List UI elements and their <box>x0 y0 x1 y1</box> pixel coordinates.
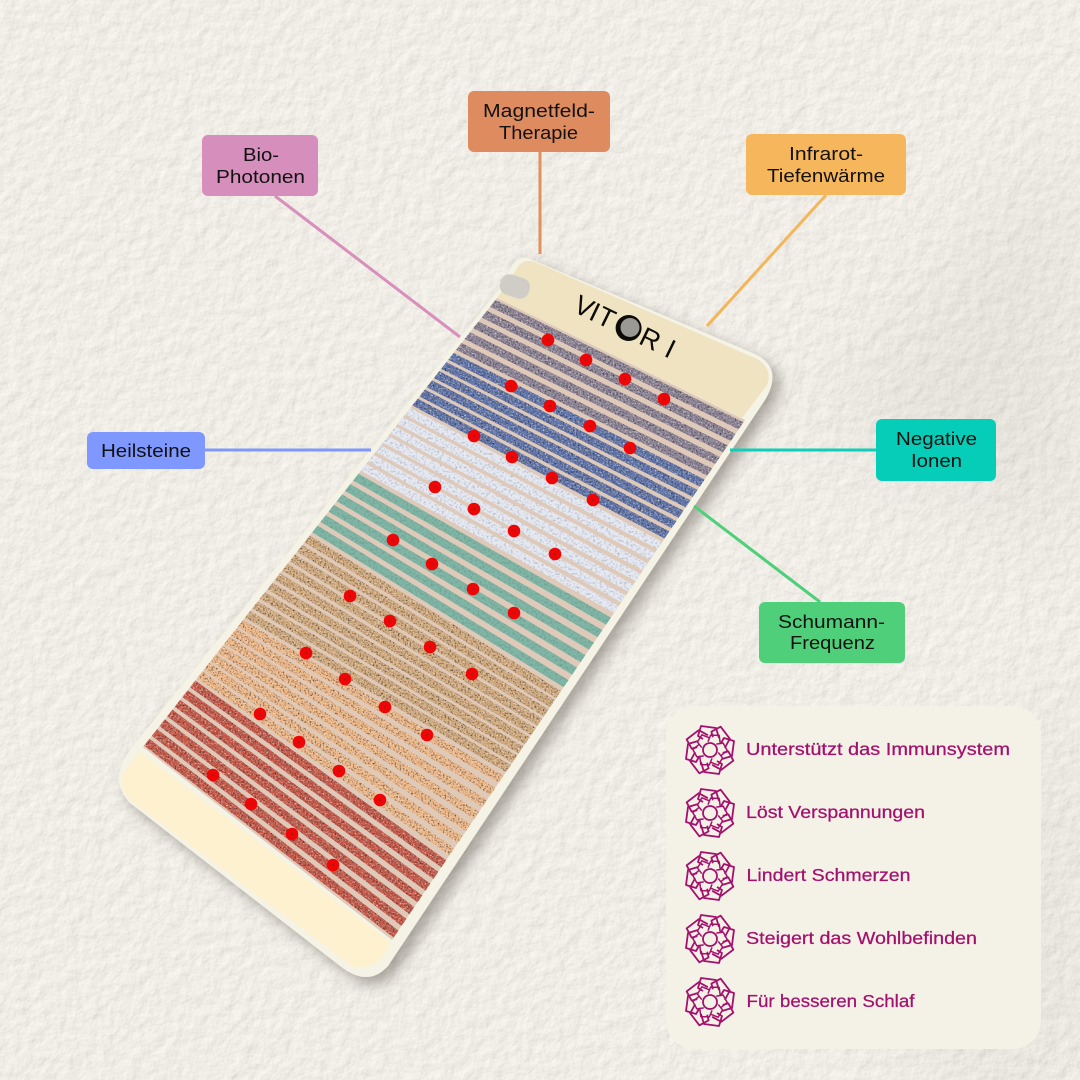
benefit: Unterstützt das Immunsystem: Unterstützt das Immunsystem <box>746 739 1010 759</box>
label: Negative Ionen: Negative <box>896 429 977 449</box>
label: Infrarot-Tiefenwärme <box>746 134 906 195</box>
label: Bio-Photonen: Bio- <box>243 145 279 165</box>
label: Infrarot-Tiefenwärme: Tiefenwärme <box>767 166 885 186</box>
label: Schumann-Frequenz <box>759 602 905 663</box>
connector: Heilsteine <box>205 448 371 452</box>
label: Negative Ionen: Ionen <box>911 451 962 471</box>
gemstone stripes <box>147 303 741 934</box>
panel: benefits <box>666 706 1041 1049</box>
band: red stones <box>147 683 444 934</box>
control button <box>497 272 532 301</box>
band: white stones <box>364 412 659 610</box>
background: soft shading <box>820 120 1080 1080</box>
VITORI logo: VITORI <box>569 289 680 364</box>
label: Magnetfeld-Therapie: Magnetfeld- <box>483 101 595 121</box>
connector: Schumann-Frequenz <box>694 506 820 602</box>
label: Infrarot-Tiefenwärme: Infrarot- <box>789 144 863 164</box>
benefit: Löst Verspannungen <box>685 788 925 838</box>
label: Heilsteine <box>87 432 205 469</box>
stripe base <box>143 298 745 940</box>
benefit: Steigert das Wohlbefinden: Steigert das Wohlbefinden <box>746 928 977 948</box>
label: Schumann-Frequenz: Schumann- <box>778 612 885 632</box>
product: VITORI mat <box>119 258 773 977</box>
benefit: Steigert das Wohlbefinden <box>685 914 977 964</box>
benefit: Für besseren Schlaf <box>685 977 915 1027</box>
band: green stones <box>313 477 609 684</box>
connector: Magnetfeld-Therapie <box>538 152 542 254</box>
benefit: Löst Verspannungen: Löst Verspannungen <box>746 802 925 822</box>
label: Heilsteine: Heilsteine <box>101 441 191 461</box>
benefit: Lindert Schmerzen <box>685 851 910 901</box>
band: purple stones <box>459 303 741 472</box>
top cream panel <box>497 261 769 418</box>
label: Bio-Photonen <box>202 135 318 196</box>
connector: Negative Ionen <box>730 448 877 452</box>
connector: Infrarot-Tiefenwärme <box>707 195 826 326</box>
label: Magnetfeld-Therapie <box>468 91 610 152</box>
label: Schumann-Frequenz: Frequenz <box>790 633 875 653</box>
band: orange stones <box>198 622 501 852</box>
bottom cream panel <box>121 752 390 967</box>
mat outer edge <box>119 258 773 977</box>
benefit: Unterstützt das Immunsystem <box>685 725 1010 775</box>
label: Negative Ionen <box>876 419 996 481</box>
benefit: Lindert Schmerzen: Lindert Schmerzen <box>746 865 910 885</box>
label: Magnetfeld-Therapie: Therapie <box>499 123 578 143</box>
band: tan stones <box>246 538 559 768</box>
band: blue stones <box>416 357 702 535</box>
connector: Bio-Photonen <box>275 196 460 337</box>
red LED dots <box>207 334 670 871</box>
benefit: Für besseren Schlaf: Für besseren Schlaf <box>746 991 915 1011</box>
label: Bio-Photonen: Photonen <box>216 167 305 187</box>
